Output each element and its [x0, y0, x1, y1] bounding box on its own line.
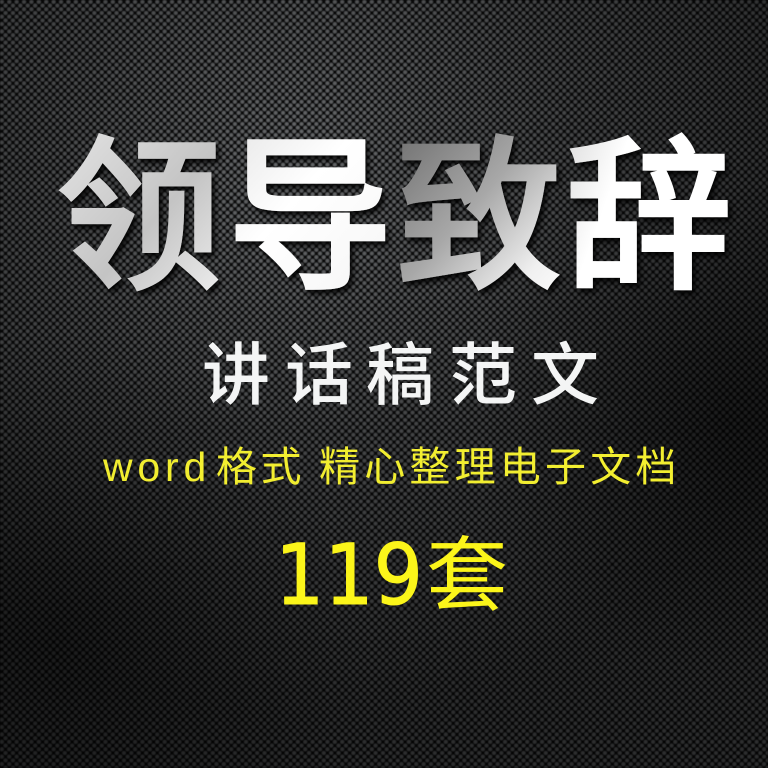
title: 领导致辞 [56, 126, 732, 311]
quantity: 119套 [275, 526, 508, 624]
quantity: 119套: 套 [426, 531, 508, 622]
subtitle: 讲话稿范文: 范 [449, 338, 517, 414]
format description line [102, 444, 681, 490]
title character 领: 领 [56, 126, 222, 311]
subtitle: 讲话稿范文: 文 [531, 338, 599, 414]
title character 致: 致 [396, 126, 562, 311]
subtitle: 讲话稿范文 [202, 338, 599, 414]
quantity: 119套: 119 [275, 526, 423, 624]
subtitle: 讲话稿范文: 话 [285, 338, 353, 414]
title character 辞: 辞 [566, 126, 732, 311]
format description line: 精心整理电子文档 [319, 444, 681, 490]
format description line: 格式 [216, 444, 305, 490]
subtitle: 讲话稿范文: 讲 [202, 338, 270, 414]
title character 导: 导 [227, 126, 393, 311]
subtitle: 讲话稿范文: 稿 [366, 338, 434, 414]
format description line: word [102, 444, 211, 490]
